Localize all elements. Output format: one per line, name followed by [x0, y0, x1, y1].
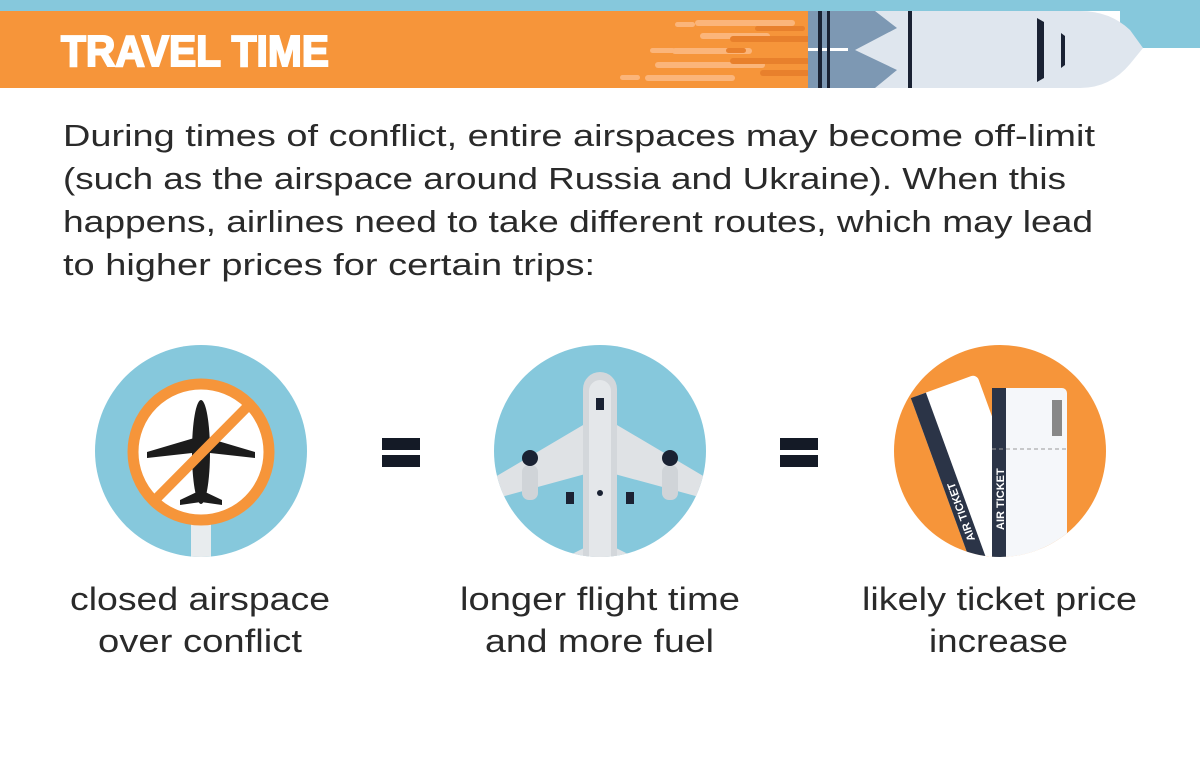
label: closed airspace: over conflict — [98, 623, 302, 659]
label: closed airspace — [70, 581, 330, 659]
rocket exhaust streaks — [620, 20, 810, 81]
label: longer flight — [460, 581, 740, 659]
icon: closed airspace — [95, 345, 307, 570]
label: longer flight: longer flight time — [460, 581, 740, 617]
header band — [0, 0, 1200, 88]
label: longer flight: and more fuel — [485, 623, 714, 659]
icon: ticket price — [894, 345, 1106, 557]
rocket — [808, 11, 1143, 88]
label: ticket price — [862, 581, 1137, 659]
icon: ticket price: AIR TICKET — [995, 468, 1007, 530]
equals sign 1 — [382, 438, 420, 467]
intro paragraph: to higher prices for certain trips: — [63, 247, 595, 282]
icon: longer flight — [494, 345, 706, 557]
intro paragraph: (such as the airspace around Russia and Ukraine). When this — [63, 161, 1066, 196]
label: closed airspace: closed airspace — [70, 581, 330, 617]
intro paragraph — [63, 118, 1095, 282]
equals sign 2 — [780, 438, 818, 467]
label: ticket price: likely ticket price — [862, 581, 1137, 617]
label: ticket price: increase — [929, 623, 1068, 659]
icon: ticket price: AIR TICKET — [945, 480, 978, 543]
intro paragraph: During times of conflict, entire airspaces may become off-limit — [63, 118, 1095, 153]
title: TRAVEL TIME — [61, 27, 329, 76]
intro paragraph: happens, airlines need to take different routes, which may lead — [63, 204, 1093, 239]
